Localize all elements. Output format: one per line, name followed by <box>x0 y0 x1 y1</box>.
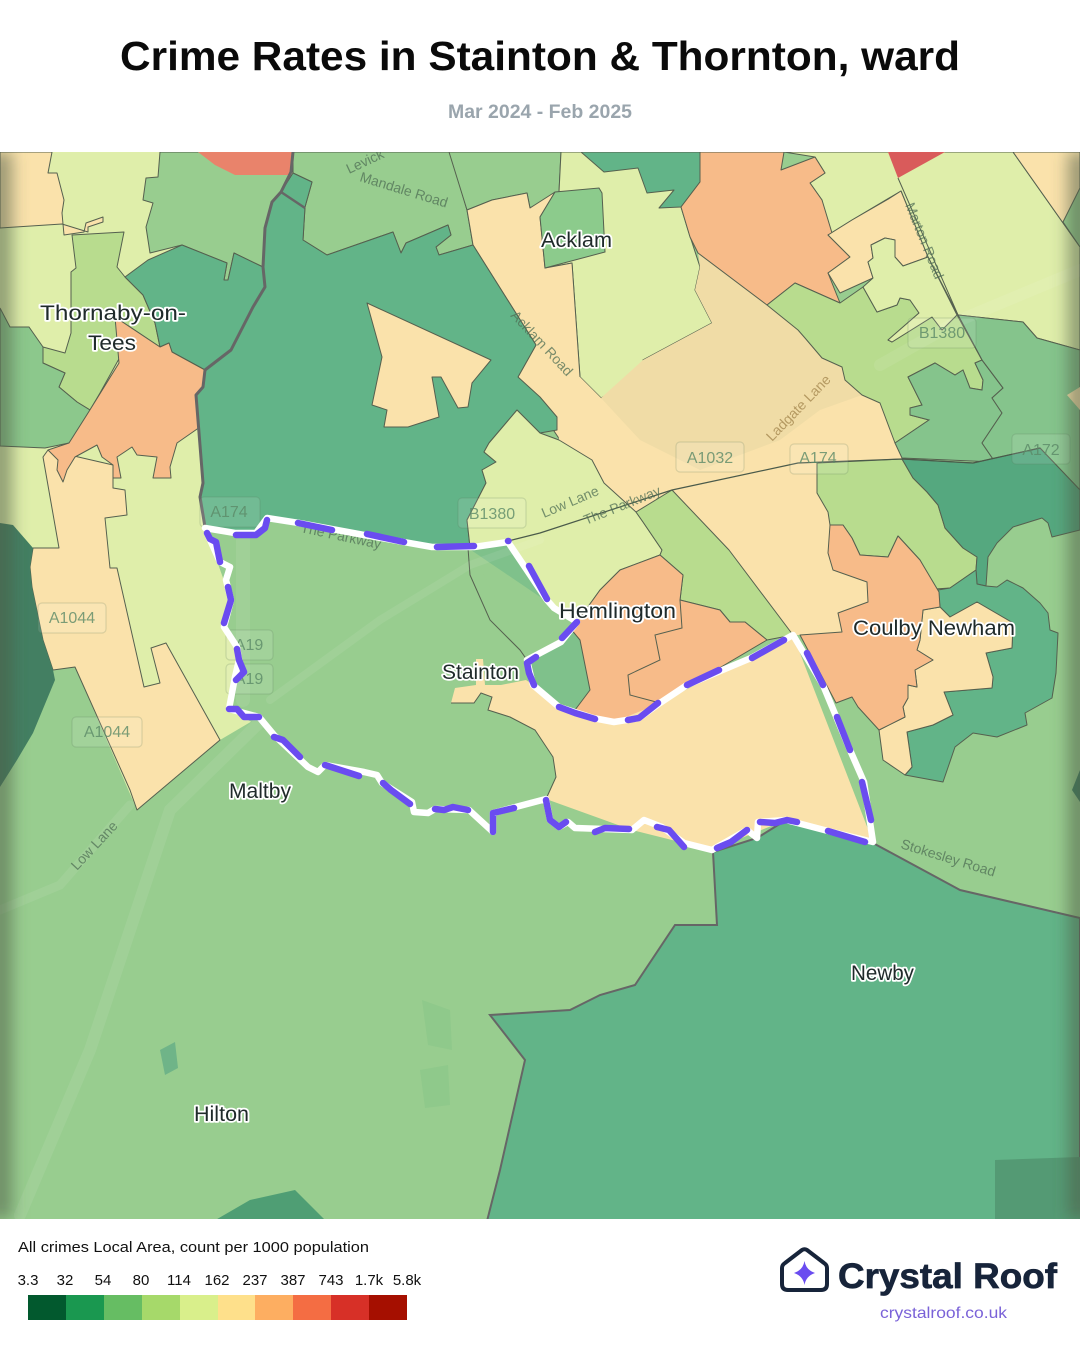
pale roads <box>248 314 982 705</box>
road shields: B1380 <box>469 506 515 523</box>
legend <box>18 1239 422 1320</box>
road names: Low Lane <box>539 482 601 521</box>
road names: Levick <box>344 145 387 177</box>
map regions: north centre <box>196 152 902 640</box>
legend labels: 237 <box>242 1272 268 1289</box>
legend colour scale <box>28 1295 407 1320</box>
road shields: A1032 <box>687 450 733 467</box>
logo: Crystal Roof <box>782 1249 1057 1322</box>
road names: Marton Road <box>902 200 947 281</box>
road shields <box>38 318 1070 747</box>
road shields: A174 <box>799 450 837 467</box>
road shields: A172 <box>1022 442 1060 459</box>
road names: Acklam Road <box>508 307 576 379</box>
icon: house with star <box>782 1249 827 1290</box>
legend labels: 743 <box>318 1272 344 1289</box>
map regions: west <box>0 152 300 810</box>
road names: Stokesley Road <box>899 836 998 880</box>
title: Crime Rates in Stainton & Thornton, ward <box>120 33 960 79</box>
legend labels: 32 <box>57 1272 73 1289</box>
road shields: A1044 <box>84 724 130 741</box>
place labels: Coulby Newham <box>853 617 1015 640</box>
place labels: Stainton <box>442 661 519 684</box>
road names: Ladgate Lane <box>763 371 834 444</box>
road names: The Parkway <box>581 482 663 528</box>
road names: Mandale Road <box>358 169 450 210</box>
wordmark: Crystal Roof <box>838 1257 1057 1296</box>
road shields: A19 <box>235 637 263 654</box>
place labels: Maltby <box>229 780 291 803</box>
place labels <box>40 229 1015 1126</box>
place labels: Hemlington <box>559 600 676 623</box>
legend labels: 54 <box>95 1272 111 1289</box>
road shields: B1380 <box>919 325 965 342</box>
river and boundary lines <box>196 152 1040 541</box>
road names: Low Lane <box>67 818 121 873</box>
road shields: A1044 <box>49 610 95 627</box>
place labels: Acklam <box>541 229 612 252</box>
legend labels: 1.7k <box>355 1272 384 1289</box>
subtitle: date range: Mar 2024 - Feb 2025 <box>448 102 632 123</box>
place labels: Tees <box>88 332 136 355</box>
website: crystalroof.co.uk <box>880 1305 1008 1322</box>
legend labels <box>18 1272 422 1289</box>
road names <box>67 145 998 880</box>
legend labels: 80 <box>133 1272 149 1289</box>
map regions: north east <box>681 152 1080 490</box>
ward boundary <box>205 518 873 850</box>
legend labels: 387 <box>280 1272 306 1289</box>
map regions: Newby <box>486 820 1080 1225</box>
place labels: Newby <box>851 962 914 985</box>
map regions: ward area <box>218 546 869 846</box>
road shields: A19 <box>235 671 263 688</box>
legend labels: 162 <box>204 1272 230 1289</box>
legend labels: 3.3 <box>18 1272 38 1289</box>
legend labels: 5.8k <box>393 1272 422 1289</box>
choropleth map <box>0 145 1080 1225</box>
road shields: A174 <box>210 504 248 521</box>
legend labels: 114 <box>167 1272 191 1289</box>
map regions: Coulby Newham <box>800 448 1080 802</box>
road names: The Parkway <box>299 519 383 552</box>
place labels: Hilton <box>194 1103 249 1126</box>
place labels: Thornaby-on- <box>40 302 186 325</box>
legend title: All crimes Local Area, count per 1000 population <box>18 1239 369 1256</box>
map regions: southern patches <box>160 1000 1080 1222</box>
